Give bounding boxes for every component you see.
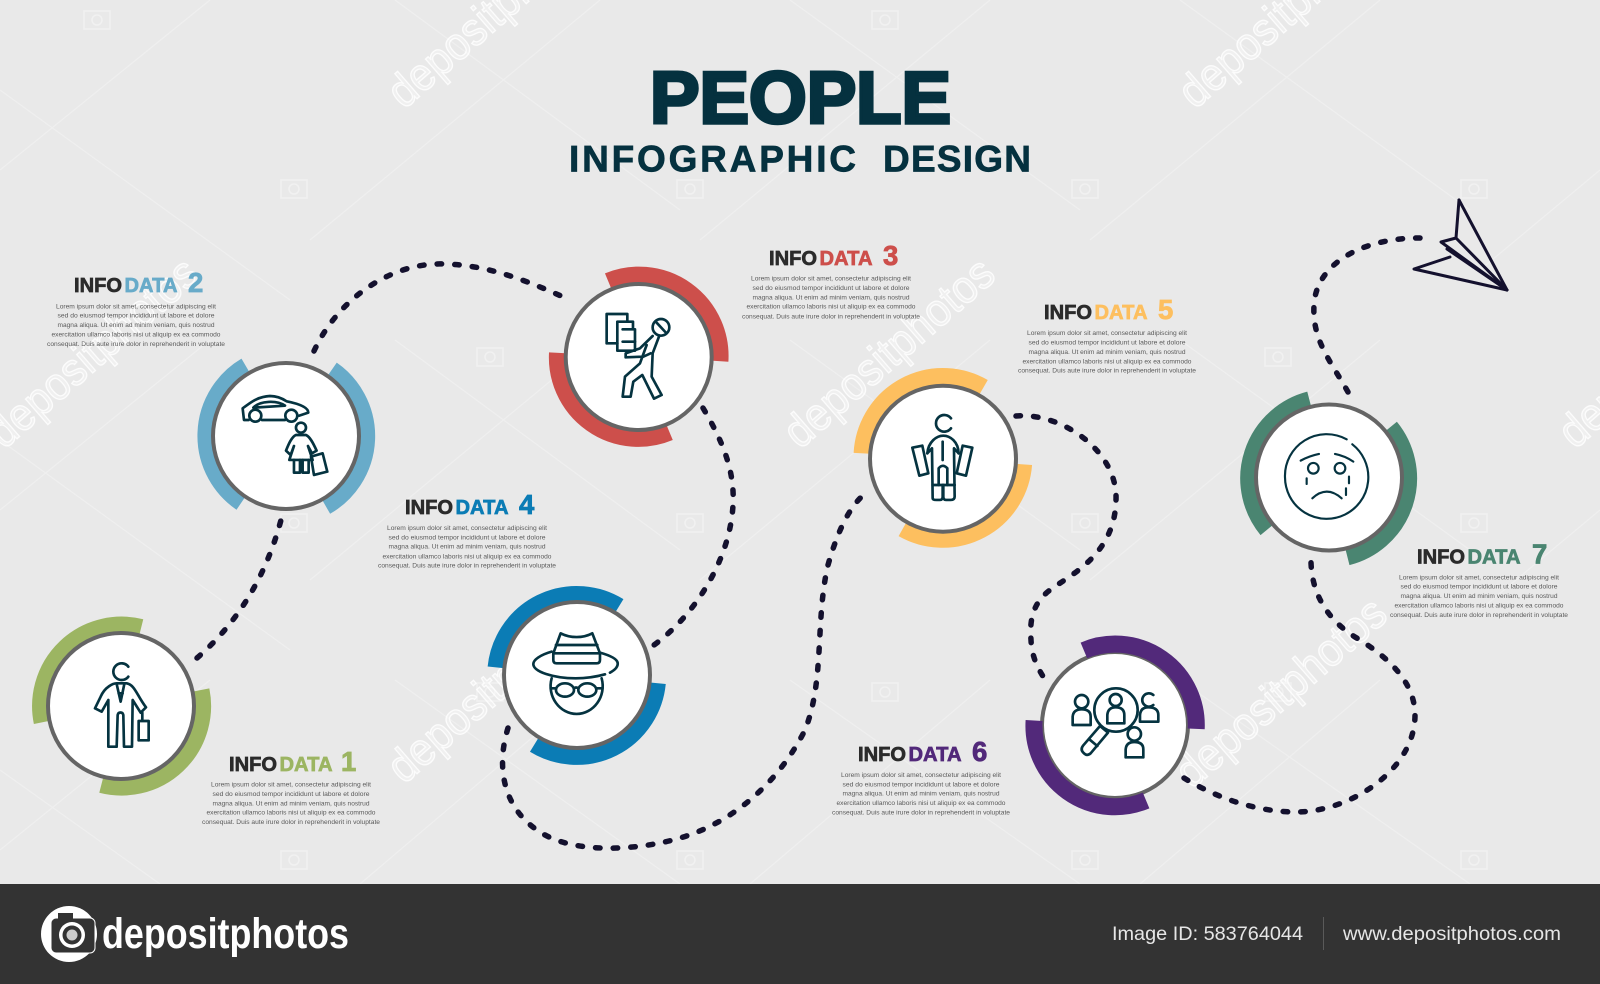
icon: crying face <box>1285 434 1368 519</box>
label: infodata 7 <box>1390 538 1568 619</box>
icon: paper plane <box>1414 200 1507 290</box>
label: infodata 3: 3 <box>883 240 898 271</box>
label: infodata 3: DATA <box>820 248 872 270</box>
icon: spy with hat and glasses <box>533 633 618 714</box>
title <box>569 58 1031 180</box>
label: infodata 3: INFO <box>769 248 817 270</box>
step 4 circle <box>496 594 657 756</box>
label: infodata 5 <box>1018 294 1196 375</box>
footer bar <box>0 884 1600 984</box>
website url: www.depositphotos.com <box>1342 923 1561 945</box>
text: depositphotos <box>1164 586 1396 798</box>
icon: person carrying boxes <box>607 314 669 399</box>
label: infodata 1: sed do eiusmod tempor incididunt ut labore et dolore <box>212 791 370 798</box>
label: infodata 7: 7 <box>1532 538 1547 570</box>
label: infodata 5: 5 <box>1158 294 1173 325</box>
step 3 circle <box>557 275 720 438</box>
label: infodata 5: consequat. Duis aute irure dolor in reprehenderit in voluptate <box>1018 368 1196 375</box>
label: infodata 1: exercitation ullamco laboris nisi ut aliquip ex ea commodo <box>206 810 376 817</box>
label: infodata 6 <box>832 736 1010 816</box>
label: infodata 2: DATA <box>124 275 178 297</box>
label: infodata 7: sed do eiusmod tempor incididunt ut labore et dolore <box>1400 584 1558 591</box>
label: infodata 4: exercitation ullamco laboris nisi ut aliquip ex ea commodo <box>382 553 552 560</box>
label: infodata 6: DATA <box>908 744 962 766</box>
label: infodata 2: magna aliqua. Ut enim ad minim veniam, quis nostrud <box>58 322 215 329</box>
label: infodata 5: Lorem ipsum dolor sit amet, consectetur adipiscing elit <box>1027 330 1187 337</box>
icon: person holding documents <box>912 415 972 500</box>
label: infodata 4: consequat. Duis aute irure dolor in reprehenderit in voluptate <box>378 563 556 570</box>
label: infodata 7: DATA <box>1468 546 1520 568</box>
label: infodata 3: exercitation ullamco laboris nisi ut aliquip ex ea commodo <box>746 304 916 311</box>
label: infodata 3: Lorem ipsum dolor sit amet, consectetur adipiscing elit <box>751 276 911 283</box>
label: infodata 2: 2 <box>188 267 203 298</box>
step 2 circle <box>206 363 367 509</box>
label: infodata 4: sed do eiusmod tempor incididunt ut labore et dolore <box>388 534 546 541</box>
label: infodata 6: sed do eiusmod tempor incididunt ut labore et dolore <box>842 781 1000 788</box>
label: infodata 4: magna aliqua. Ut enim ad minim veniam, quis nostrud <box>388 544 546 551</box>
label: infodata 3: magna aliqua. Ut enim ad minim veniam, quis nostrud <box>752 294 910 301</box>
label: infodata 2: sed do eiusmod tempor incididunt ut labore et dolore <box>58 313 215 320</box>
label: infodata 5: exercitation ullamco laboris nisi ut aliquip ex ea commodo <box>1022 358 1192 365</box>
icon: depositphotos camera logo <box>41 906 97 962</box>
step 7 circle <box>1249 400 1409 557</box>
label: infodata 1: Lorem ipsum dolor sit amet, consectetur adipiscing elit <box>211 782 371 788</box>
label: infodata 4 <box>378 489 556 570</box>
label: infodata 5: DATA <box>1094 302 1148 324</box>
label: infodata 3: sed do eiusmod tempor incididunt ut labore et dolore <box>752 285 910 292</box>
step 6 circle <box>1034 644 1196 807</box>
title: PEOPLE <box>650 58 951 139</box>
label: infodata 2: exercitation ullamco laboris nisi ut aliquip ex ea commodo <box>52 332 221 339</box>
label: infodata 1: magna aliqua. Ut enim ad minim veniam, quis nostrud <box>212 800 370 807</box>
label: infodata 7: consequat. Duis aute irure dolor in reprehenderit in voluptate <box>1390 612 1568 619</box>
icon: businessman with briefcase <box>95 663 149 747</box>
label: infodata 3: consequat. Duis aute irure dolor in reprehenderit in voluptate <box>742 313 920 320</box>
logo wordmark: depositphotos <box>102 910 349 958</box>
label: infodata 4: INFO <box>405 497 453 519</box>
label: infodata 1: 1 <box>341 746 356 777</box>
label: infodata 6: magna aliqua. Ut enim ad minim veniam, quis nostrud <box>842 791 1000 798</box>
step 5 circle <box>862 377 1024 539</box>
dashed route path <box>197 238 1420 848</box>
text: depositphotos <box>376 581 608 793</box>
image id: Image ID: 583764044 <box>1112 923 1303 945</box>
label: infodata 1: consequat. Duis aute irure dolor in reprehenderit in voluptate <box>202 819 380 826</box>
label: infodata 5: INFO <box>1044 302 1092 324</box>
label: infodata 1 <box>202 746 380 826</box>
label: infodata 2 <box>47 267 225 348</box>
label: infodata 7: magna aliqua. Ut enim ad minim veniam, quis nostrud <box>1400 593 1558 600</box>
label: infodata 6: 6 <box>972 736 987 767</box>
label: infodata 6: consequat. Duis aute irure dolor in reprehenderit in voluptate <box>832 809 1010 816</box>
label: infodata 4: 4 <box>519 489 535 520</box>
text: depositphotos <box>772 246 1004 458</box>
label: infodata 7: exercitation ullamco laboris nisi ut aliquip ex ea commodo <box>1394 602 1564 609</box>
label: infodata 1: DATA <box>280 754 332 776</box>
label: infodata 4: Lorem ipsum dolor sit amet, consectetur adipiscing elit <box>387 525 547 532</box>
label: infodata 6: exercitation ullamco laboris nisi ut aliquip ex ea commodo <box>836 800 1006 807</box>
label: infodata 2: consequat. Duis aute irure dolor in reprehenderit in voluptate <box>47 341 225 348</box>
label: infodata 5: magna aliqua. Ut enim ad minim veniam, quis nostrud <box>1028 349 1186 356</box>
label: infodata 4: DATA <box>456 497 508 519</box>
icon: people search magnifier <box>1073 688 1158 757</box>
icon: car and woman with shopping bag <box>243 396 327 475</box>
label: infodata 5: sed do eiusmod tempor incididunt ut labore et dolore <box>1028 339 1186 346</box>
label: infodata 7: Lorem ipsum dolor sit amet, consectetur adipiscing elit <box>1399 574 1559 581</box>
label: infodata 6: Lorem ipsum dolor sit amet, consectetur adipiscing elit <box>841 772 1001 779</box>
title: INFOGRAPHIC <box>569 138 856 180</box>
label: infodata 3 <box>742 240 920 320</box>
title: DESIGN <box>883 138 1031 180</box>
step 1 circle <box>41 625 203 787</box>
label: infodata 1: INFO <box>229 754 277 776</box>
label: infodata 2: Lorem ipsum dolor sit amet, consectetur adipiscing elit <box>56 303 216 310</box>
label: infodata 7: INFO <box>1417 546 1465 568</box>
label: infodata 2: INFO <box>74 275 122 297</box>
label: infodata 6: INFO <box>858 744 906 766</box>
